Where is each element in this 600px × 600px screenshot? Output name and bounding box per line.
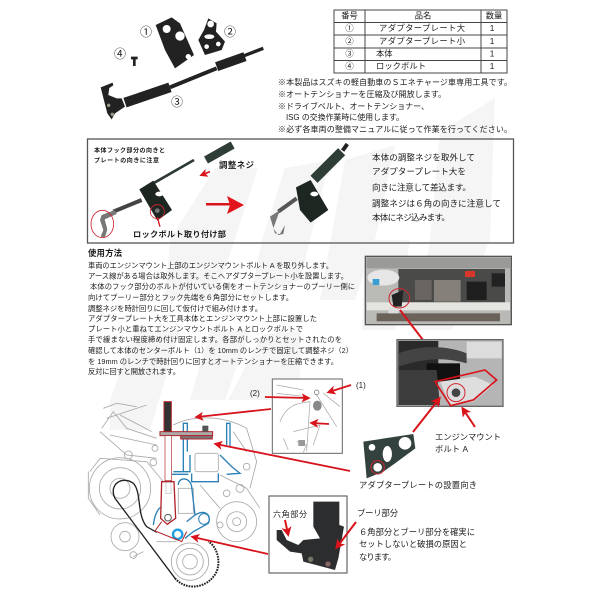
notes text block: ※本製品はスズキの軽自動車のＳエネチャージ車専用工具です。 [278, 77, 512, 87]
label: engine mount bolt A: ボルト A [435, 444, 468, 454]
parts table: 数量 [486, 11, 502, 21]
adapter plate photo [363, 434, 415, 478]
instructions text: 本体の調整ネジを取外して [372, 151, 475, 162]
usage text block: 向けてプーリー部分とフック先端を６角部分にセットします。 [88, 293, 293, 302]
notes text block: ISG の交換作業時に使用します。 [286, 112, 404, 122]
label: adjusting screw: 調整ネジ [219, 160, 255, 170]
inset: hook detail [269, 496, 356, 573]
arrow: bolt A pointer [463, 409, 475, 427]
label 2: ② [224, 25, 236, 39]
instructions text: 調整ネジは６角の向きに注意して [372, 197, 501, 208]
notes text block: ※オートテンショナーを圧縮及び開放します。 [278, 89, 446, 99]
parts table: ③ [345, 49, 354, 59]
notes text block [278, 77, 512, 134]
parts photo [101, 17, 263, 119]
label 4: ④ [114, 47, 126, 61]
usage text block: プレート小と重ねてエンジンマウントボルト A とロックボルトで [88, 324, 303, 333]
instructions text: 本体にネジ込みます。 [372, 211, 450, 222]
photo: engine bay [365, 256, 511, 325]
label: plate orientation: アダプタープレートの設置向き [359, 480, 477, 490]
assembly note: 本体フック部分の向きと [94, 147, 165, 155]
notes text block: ※必ず各車両の整備マニュアルに従って作業を行ってください。 [278, 124, 512, 134]
parts table [334, 10, 507, 73]
parts table: 1 [490, 23, 495, 33]
inset: bolt detail [272, 379, 342, 453]
engine outline [88, 403, 260, 580]
assembly note: プレートの向きに注意 [94, 157, 159, 165]
usage text block: を 19mm のレンチで時計回りに回すとオートテンショナーを圧縮できます。 [88, 357, 338, 366]
usage text block: アース線がある場合は取外します。そこへアダプタープレート小を設置します。 [88, 271, 348, 280]
parts table: 本体 [376, 49, 393, 59]
label: lock bolt mount: ロックボルト取り付け部 [133, 229, 226, 239]
parts table: 1 [490, 61, 495, 71]
label: pulley part: ブーリ部分 [357, 508, 399, 518]
parts table: アダプタープレート大 [379, 23, 465, 33]
label: engine mount bolt A: エンジンマウント [435, 432, 501, 442]
parts table: アダプタープレート小 [379, 36, 466, 46]
caution text [359, 527, 475, 562]
label: hex part: 六角部分 [273, 509, 307, 519]
parts table: ロックボルト [376, 61, 426, 71]
usage text block: 反対に回すと開放されます。 [88, 367, 180, 376]
label: (2): (2) [250, 389, 260, 398]
part 3: tool body [101, 48, 263, 119]
usage text block: 調整ネジを時計回りに回して仮付けで組み付けます。 [88, 304, 262, 313]
notes text block: ※ドライブベルト、オートテンショナー、 [278, 101, 429, 111]
label: engine mount bolt A [435, 432, 501, 454]
arrow: hex part [285, 520, 288, 534]
usage text block: 確認して本体のセンターボルト（1）を 10mm のレンチで固定して調整ネジ（2） [88, 346, 353, 355]
label 3: ③ [171, 95, 183, 109]
tool overlay [155, 402, 213, 542]
diagram: assembled tool [270, 144, 347, 235]
instructions text: アダプタープレート大を [372, 165, 466, 176]
part 4: lock bolt [131, 57, 138, 66]
instructions text: 向きに注意して差込ます。 [372, 181, 471, 192]
instructions text [372, 151, 501, 222]
arrow: assembly direction [206, 196, 244, 214]
arrow: engine bay to mount [400, 310, 433, 353]
usage text block: アダプタープレート大を工具本体とエンジンマウント上部に設置した [88, 314, 317, 323]
usage text block: 手で緩まない程度締め付け固定します。各部がしっかりとセットされたのを [88, 335, 342, 344]
heading: usage: 使用方法 [88, 248, 123, 258]
parts table: ② [345, 36, 354, 46]
caution text: なります。 [359, 552, 396, 562]
parts table: ④ [345, 61, 354, 71]
caution text: ６角部分とブーリ部分を確実に [359, 527, 475, 537]
parts table: 1 [490, 49, 495, 59]
arrows: bolt detail pointers [193, 385, 351, 554]
assembly note [94, 147, 165, 165]
arrow: plate to mount [413, 399, 439, 432]
panel: assembly steps [88, 139, 514, 243]
blue outlines [153, 423, 240, 539]
parts table: 品名 [415, 11, 431, 21]
usage text block: 本体のフック部分のボルトが付いている側をオートテンショナーのプーリー側に [90, 282, 355, 291]
hook photo [277, 502, 344, 570]
photo: engine mount closeup [397, 340, 503, 406]
parts table: 番号 [341, 11, 358, 21]
usage text block [88, 261, 355, 376]
part 1: large adapter plate [156, 17, 194, 68]
usage text block: 車両のエンジンマウント上部のエンジンマウントボルト A を取り外します。 [88, 261, 333, 270]
part 2: small adapter plate [198, 18, 225, 55]
engine line drawing [88, 402, 260, 587]
watermark background [110, 98, 495, 430]
parts table: ① [345, 23, 354, 33]
label: (1): (1) [356, 381, 366, 390]
caution text: セットしないと破損の原因と [359, 539, 467, 549]
belt [113, 480, 175, 578]
parts table: 1 [490, 36, 495, 46]
diagram: disassembled tool [91, 145, 233, 238]
arrow: pulley part [337, 522, 356, 547]
label 1: ① [140, 25, 152, 39]
